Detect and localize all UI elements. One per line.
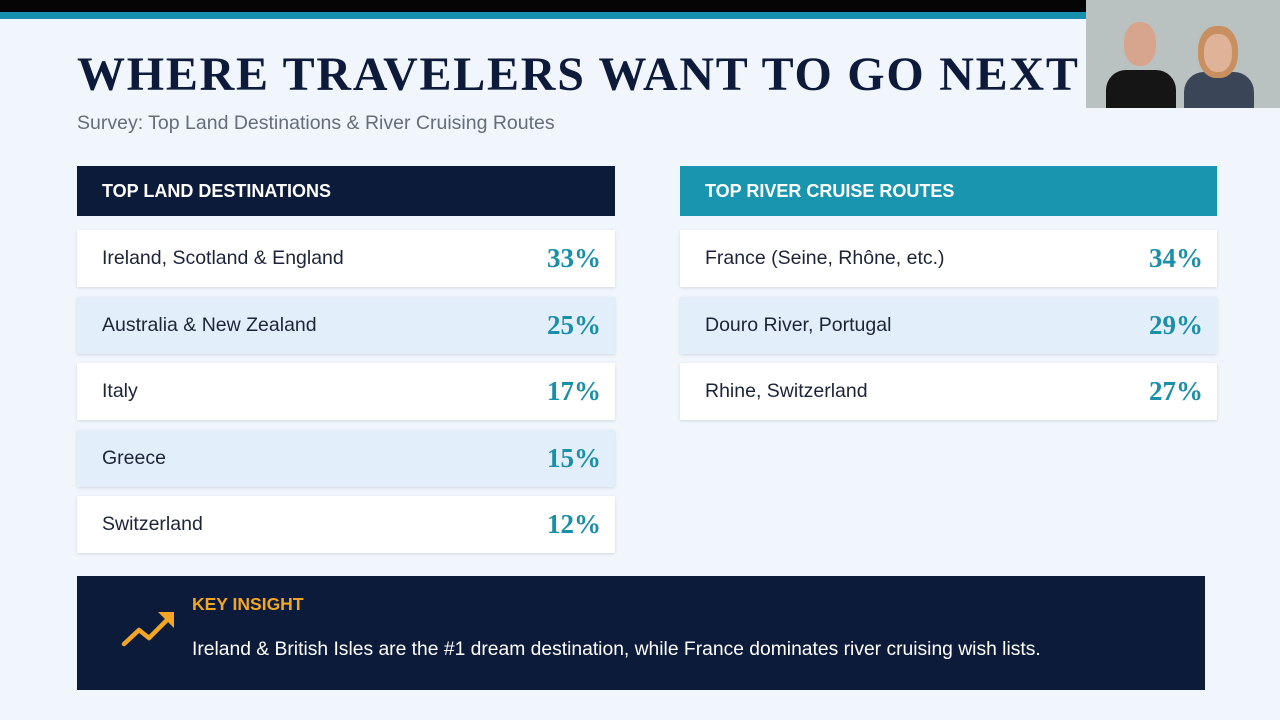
panel: top river cruise routes <box>679 166 1218 422</box>
row: Douro: 29% <box>1149 310 1203 340</box>
row: Italy: Italy <box>102 380 138 402</box>
row: Ireland: 33% <box>547 243 601 273</box>
panel: top land destinations <box>76 166 616 555</box>
row: France: 34% <box>1149 243 1203 273</box>
row: Switzerland <box>77 496 615 553</box>
row: Italy <box>77 363 615 420</box>
header: land: TOP LAND DESTINATIONS <box>102 181 331 201</box>
subtitle: Survey: Top Land Destinations & River Cruising Routes <box>77 112 555 134</box>
row: Switzerland: Switzerland <box>102 513 203 535</box>
row: Greece: 15% <box>547 443 601 473</box>
row: Greece <box>77 430 615 487</box>
row: Australia: 25% <box>547 310 601 340</box>
row: France: France (Seine, Rhône, etc.) <box>705 247 945 269</box>
row: Douro: Douro River, Portugal <box>705 314 891 336</box>
insight heading: KEY INSIGHT <box>192 594 304 614</box>
row: Ireland: Ireland, Scotland & England <box>102 247 344 269</box>
header: river: TOP RIVER CRUISE ROUTES <box>705 181 954 201</box>
row: Greece: Greece <box>102 447 166 469</box>
icon: trending arrow <box>122 612 174 646</box>
row: Rhine: 27% <box>1149 376 1203 406</box>
webcam video inset <box>1086 0 1280 108</box>
row: France <box>680 230 1217 287</box>
row: Australia <box>77 297 615 354</box>
callout: key insight <box>77 576 1205 690</box>
insight text: Ireland & British Isles are the #1 dream destination, while France dominates river cruising wish lists. <box>192 639 1041 660</box>
row: Australia: Australia & New Zealand <box>102 314 317 336</box>
row: Italy: 17% <box>547 376 601 406</box>
row: Switzerland: 12% <box>547 509 601 539</box>
row: Rhine: Rhine, Switzerland <box>705 380 868 402</box>
header: land <box>77 166 615 216</box>
title: WHERE TRAVELERS WANT TO GO NEXT <box>77 48 1080 101</box>
row: Rhine <box>680 363 1217 420</box>
header: river <box>680 166 1217 216</box>
row: Ireland <box>77 230 615 287</box>
row: Douro <box>680 297 1217 354</box>
top bar <box>0 0 1280 12</box>
